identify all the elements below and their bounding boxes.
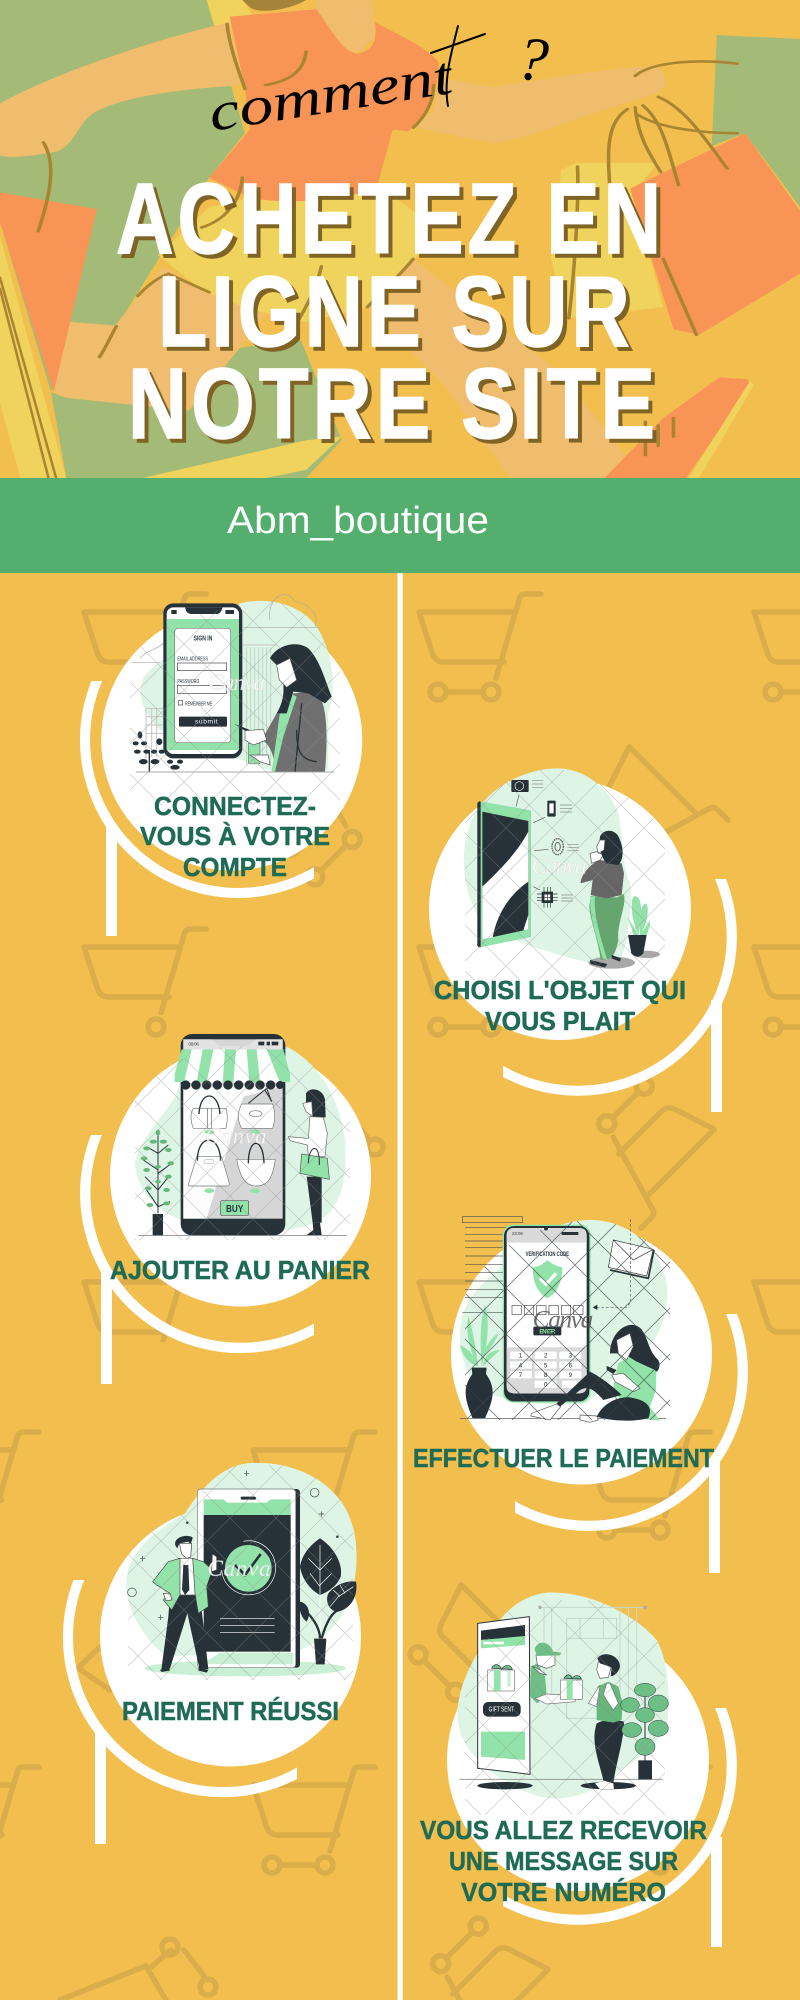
panel: choisi l'objet: [429, 768, 737, 1112]
title: Achetez en ligne sur notre site: [116, 163, 669, 464]
label: COMPTE: [183, 852, 287, 882]
title: Achetez en ligne sur notre site: NOTRE SITE: [128, 348, 659, 460]
illustration: sign-in phone and woman: Canva: [208, 670, 265, 696]
title: Achetez en ligne sur notre site: LIGNE SUR: [158, 257, 634, 368]
illustration: verification code phone: 6: [569, 1362, 573, 1369]
illustration: sign-in phone and woman: PASSWORD: [177, 679, 199, 685]
title: Achetez en ligne sur notre site: ACHETEZ EN: [120, 167, 669, 279]
illustration: sign-in phone and woman: REMEMBER ME: [185, 701, 213, 707]
lattice watermark: [465, 770, 665, 980]
title: Achetez en ligne sur notre site: LIGNE SUR: [162, 261, 638, 372]
label: VOTRE NUMÉRO: [461, 1877, 666, 1907]
illustration: sign-in phone and woman: submit: [195, 719, 218, 726]
illustration: payment success phone and man: Canva: [207, 1556, 271, 1582]
illustration: phone specs and woman: [464, 768, 660, 969]
illustration: verification code phone: 4: [519, 1362, 523, 1369]
illustration: phone specs and woman: Canva: [532, 853, 587, 879]
illustration: verification code phone: 5: [544, 1362, 548, 1369]
lattice watermark: [130, 600, 340, 805]
script heading: comment ?: [204, 24, 551, 143]
green banner: Abm_boutique: Abm_boutique: [227, 500, 489, 542]
illustration: verification code phone: 23:06: [512, 1231, 523, 1236]
title: Achetez en ligne sur notre site: NOTRE SITE: [132, 352, 663, 464]
label: VOUS ALLEZ RECEVOIR: [420, 1815, 707, 1845]
panel: connectez-vous: [80, 595, 362, 936]
illustration: verification code phone: 0: [544, 1382, 548, 1389]
label: PAIEMENT RÉUSSI: [122, 1696, 339, 1726]
illustration: shop phone with bags: BUY: [226, 1204, 244, 1215]
illustration: verification code phone: 2: [544, 1353, 548, 1360]
illustration: shop phone with bags: Canva: [205, 1123, 267, 1149]
panel: paiement réussi: [63, 1463, 361, 1844]
illustration: delivery and gift: GIFT SENT: [489, 1707, 515, 1714]
label: CONNECTEZ-: [154, 791, 316, 821]
lattice watermark: [465, 1220, 670, 1420]
lattice watermark: [465, 1600, 665, 1815]
illustration: delivery and gift: [458, 1592, 669, 1799]
background cart pattern: [0, 594, 800, 2000]
centre divider: [398, 573, 403, 2000]
illustration: verification code phone: 7: [519, 1372, 523, 1379]
lattice watermark: [128, 1465, 353, 1680]
illustration: shop phone with bags: 08:06: [188, 1042, 199, 1048]
label: [434, 975, 686, 1036]
illustration: payment success phone and man: [126, 1463, 357, 1676]
illustration: verification code phone: 8: [544, 1372, 548, 1379]
illustration: shop phone with bags: [135, 1034, 347, 1235]
illustration: verification code phone: VERIFICATION CODE: [526, 1251, 569, 1258]
green banner: Abm_boutique: [0, 478, 800, 573]
label: VOUS PLAIT: [485, 1006, 635, 1036]
illustration: verification code phone: 1: [519, 1353, 523, 1360]
label: AJOUTER AU PANIER: [110, 1255, 370, 1285]
header illustration: shopper with bags: [0, 0, 800, 478]
illustration: verification code phone: 9: [569, 1372, 573, 1379]
panel: vous allez recevoir: [420, 1592, 737, 1947]
lattice watermark: [135, 1040, 350, 1240]
script heading: comment ?: ?: [514, 24, 551, 95]
panel: ajouter au panier: [80, 1034, 371, 1384]
label: [140, 791, 330, 882]
panel: effectuer le paiement: [413, 1217, 748, 1573]
illustration: verification code phone: 3: [569, 1353, 573, 1360]
illustration: verification code phone: ENTER: [539, 1329, 556, 1335]
illustration: sign-in phone and woman: EMAIL ADDRESS: [177, 657, 208, 663]
title: Achetez en ligne sur notre site: ACHETEZ EN: [116, 163, 665, 275]
script heading: comment ?: comment: [204, 45, 458, 143]
label: UNE MESSAGE SUR: [449, 1846, 678, 1876]
illustration: verification code phone: Canva: [533, 1305, 593, 1333]
label: VOUS À VOTRE: [140, 821, 330, 851]
illustration: sign-in phone and woman: [132, 595, 334, 772]
label: [420, 1815, 707, 1907]
label: EFFECTUER LE PAIEMENT: [413, 1443, 714, 1473]
label: CHOISI L'OBJET QUI: [434, 975, 686, 1005]
illustration: verification code phone: [460, 1217, 667, 1422]
illustration: sign-in phone and woman: SIGN IN: [194, 634, 212, 643]
